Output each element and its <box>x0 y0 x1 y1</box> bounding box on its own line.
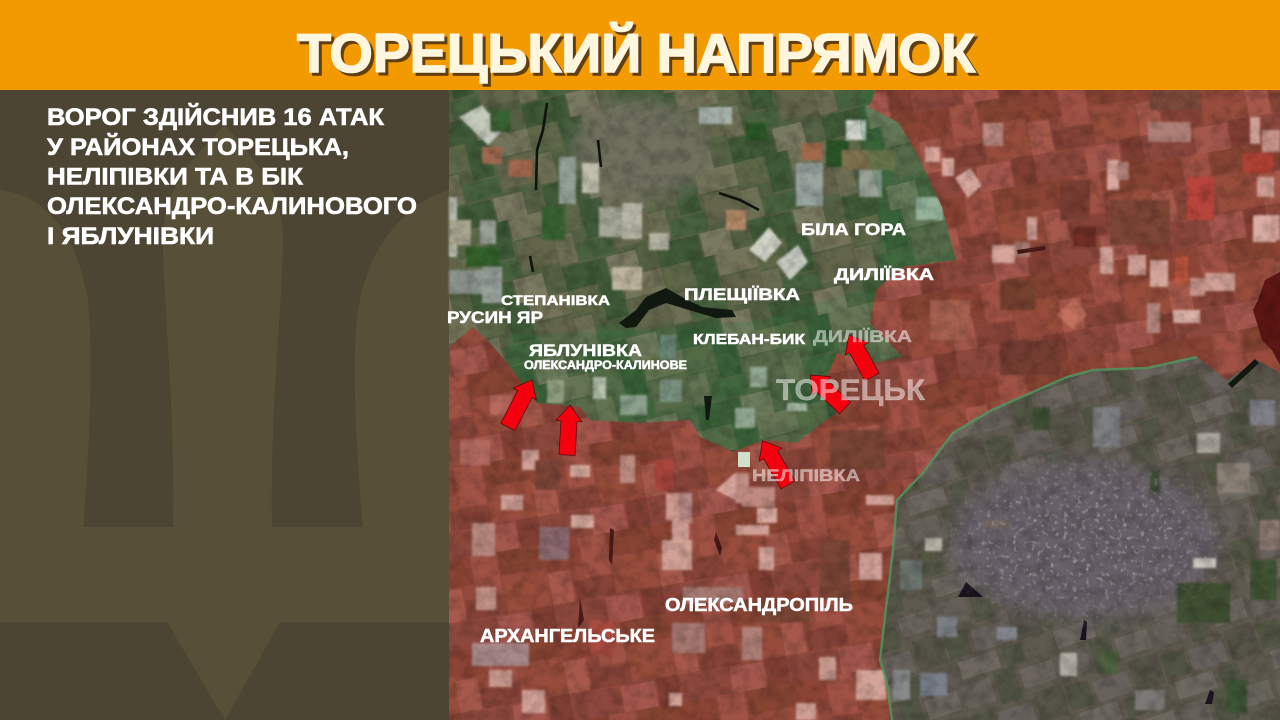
label: Dyliivka translucent: ДИЛІЇВКА <box>813 327 912 346</box>
label: Dyliivka north: ДИЛІЇВКА <box>834 265 934 284</box>
attack arrows <box>496 329 883 492</box>
summary text block: ВОРОГ ЗДІЙСНИВ 16 АТАК <box>47 103 384 131</box>
arrow: towards Yablunivka <box>554 404 583 456</box>
southern red fields <box>460 395 894 720</box>
eastern green edge <box>860 90 956 270</box>
label: Nelipivka: НЕЛІПІВКА <box>752 466 860 485</box>
label: Yablunivka: ЯБЛУНІВКА <box>529 341 642 360</box>
arrow: north of Toretsk <box>838 329 883 383</box>
Kostiantynivka city blob <box>570 98 710 202</box>
label: Toretsk: ТОРЕЦЬК <box>776 374 926 407</box>
label: Pleshchiivka: ПЛЕЩІЇВКА <box>684 285 800 304</box>
arrow: towards Oleksandro-Kalynove <box>496 374 544 433</box>
front line on grey zone <box>880 357 1197 720</box>
label: Rusyn Yar: РУСИН ЯР <box>447 308 543 327</box>
header banner <box>0 0 1280 90</box>
label: Oleksandro-Kalynove: ОЛЕКСАНДРО-КАЛИНОВЕ <box>524 360 687 372</box>
grey zone ponds <box>958 582 1214 704</box>
label: Kleban-Byk: КЛЕБАН-БИК <box>693 331 806 348</box>
terrain grain <box>449 90 1280 720</box>
grey zone fields <box>893 400 1280 713</box>
summary text block: ОЛЕКСАНДРО-КАЛИНОВОГО <box>47 193 417 220</box>
arrow: from Nelipivka <box>751 434 799 492</box>
urban area tone <box>950 460 1220 620</box>
label: Bila Hora: БІЛА ГОРА <box>801 220 906 239</box>
occupied lake <box>1253 272 1280 365</box>
water bodies <box>619 288 1259 420</box>
place labels <box>447 220 934 646</box>
label: Arkhanhelske: АРХАНГЕЛЬСЬКЕ <box>480 626 655 646</box>
satellite map <box>449 90 1280 720</box>
summary text block <box>47 103 417 250</box>
urban specks <box>944 452 1228 628</box>
northern terrain base <box>449 90 969 450</box>
sidebar panel <box>0 90 450 720</box>
label: Oleksandropil: ОЛЕКСАНДРОПІЛЬ <box>665 595 853 615</box>
southern green band <box>507 290 903 452</box>
summary text block: НЕЛІПІВКИ ТА В БІК <box>47 164 303 190</box>
trident watermark <box>0 125 450 720</box>
grey zone around Donetsk agglomeration <box>880 357 1280 720</box>
northern creeks <box>530 103 759 272</box>
northern farm fields <box>449 105 943 428</box>
label: Stepanivka: СТЕПАНІВКА <box>501 292 610 308</box>
dark ponds in occupied zone <box>578 246 1045 628</box>
title: ТОРЕЦЬКИЙ НАПРЯМОК <box>297 21 975 84</box>
north-eastern red fields <box>925 90 1280 375</box>
occupied territory <box>449 90 1280 720</box>
summary text block: У РАЙОНАХ ТОРЕЦЬКА, <box>47 133 349 161</box>
arrow: at Toretsk <box>801 366 854 417</box>
pale field at front line <box>738 452 750 467</box>
summary text block: І ЯБЛУНІВКИ <box>47 223 214 250</box>
